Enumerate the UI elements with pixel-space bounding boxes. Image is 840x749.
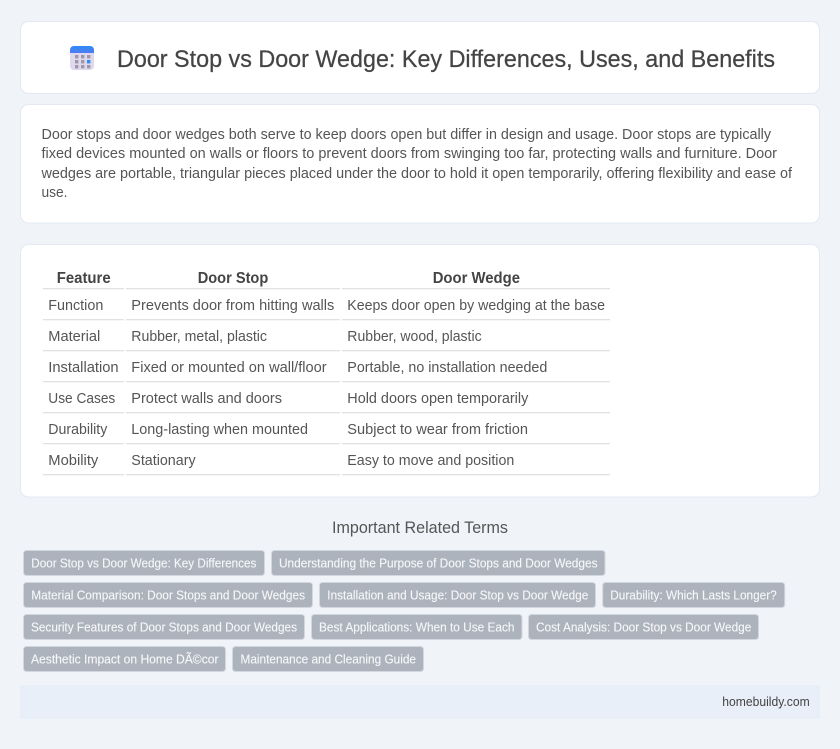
tag bbox=[24, 582, 312, 608]
table row: material: Rubber, wood, plastic bbox=[347, 329, 482, 345]
table row: material bbox=[43, 329, 610, 351]
table row: durability: Long-lasting when mounted bbox=[131, 422, 308, 438]
tag bbox=[272, 550, 605, 576]
tag bbox=[24, 646, 226, 672]
table row: mobility: Stationary bbox=[131, 453, 196, 469]
tag bbox=[603, 582, 785, 608]
table row: mobility: Easy to move and position bbox=[347, 453, 514, 469]
table row: durability bbox=[43, 422, 610, 444]
tag: Installation and Usage: Door Stop vs Door Wedge bbox=[327, 587, 588, 602]
table row: installation: Portable, no installation needed bbox=[347, 360, 547, 376]
tag: Cost Analysis: Door Stop vs Door Wedge bbox=[536, 619, 751, 634]
panel: title header bbox=[20, 22, 820, 94]
icon: calendar grid bbox=[70, 46, 94, 70]
table header row bbox=[43, 270, 610, 289]
panel: introduction text: fixed devices mounted on walls or floors to prevent doors from swinging too far, protecting walls and furniture. Door bbox=[42, 146, 777, 162]
table row: material: Rubber, metal, plastic bbox=[131, 329, 267, 345]
table row: durability: Durability bbox=[48, 422, 108, 438]
tag: Door Stop vs Door Wedge: Key Differences bbox=[31, 555, 256, 570]
tag: Maintenance and Cleaning Guide bbox=[240, 651, 416, 666]
table header row: Door Stop bbox=[198, 270, 268, 287]
table row: installation: Installation bbox=[48, 360, 119, 376]
footer: homebuildy.com bbox=[722, 694, 810, 709]
title: Door Stop vs Door Wedge: Key Differences, Uses, and Benefits bbox=[117, 46, 775, 73]
tag: Material Comparison: Door Stops and Door Wedges bbox=[31, 587, 305, 602]
panel: introduction text: Door stops and door wedges both serve to keep doors open but differ in design and usage. Door stops are typically bbox=[42, 127, 772, 143]
tag bbox=[24, 550, 264, 576]
table row: function bbox=[43, 298, 610, 320]
table row: mobility: Mobility bbox=[48, 453, 99, 469]
footer bbox=[20, 685, 820, 719]
tag: Durability: Which Lasts Longer? bbox=[610, 587, 777, 602]
panel: introduction text: use. bbox=[42, 185, 68, 201]
table row: material: Material bbox=[48, 329, 100, 345]
panel: comparison table bbox=[20, 244, 820, 497]
tag: Understanding the Purpose of Door Stops and Door Wedges bbox=[279, 555, 598, 570]
panel: related term tags bbox=[24, 550, 785, 672]
table row: use cases: Hold doors open temporarily bbox=[347, 391, 529, 407]
tag bbox=[312, 614, 522, 640]
table header row: Feature bbox=[57, 270, 111, 287]
tag bbox=[24, 614, 304, 640]
tag: Aesthetic Impact on Home DÃ©cor bbox=[31, 651, 219, 666]
panel: introduction text bbox=[20, 104, 820, 223]
table row: installation: Fixed or mounted on wall/floor bbox=[131, 360, 327, 376]
table row: installation bbox=[43, 360, 610, 382]
table row: mobility bbox=[43, 453, 610, 475]
table row: function: Prevents door from hitting walls bbox=[131, 298, 334, 314]
table row: use cases bbox=[43, 391, 610, 413]
table row: function: Function bbox=[48, 298, 103, 314]
table row: durability: Subject to wear from friction bbox=[347, 422, 528, 438]
tag bbox=[528, 614, 758, 640]
tag bbox=[232, 646, 424, 672]
tag: Best Applications: When to Use Each bbox=[319, 619, 514, 634]
tag: Security Features of Door Stops and Door Wedges bbox=[31, 619, 297, 634]
panel: introduction text: wedges are portable, triangular pieces placed under the door to hold it open temporarily, offering flexibility and ease of bbox=[41, 166, 793, 182]
heading: related terms: Important Related Terms bbox=[332, 519, 508, 537]
table row: use cases: Use Cases bbox=[48, 391, 115, 407]
table row: function: Keeps door open by wedging at the base bbox=[347, 298, 605, 314]
tag bbox=[320, 582, 596, 608]
table header row: Door Wedge bbox=[433, 270, 520, 287]
table row: use cases: Protect walls and doors bbox=[131, 391, 282, 407]
